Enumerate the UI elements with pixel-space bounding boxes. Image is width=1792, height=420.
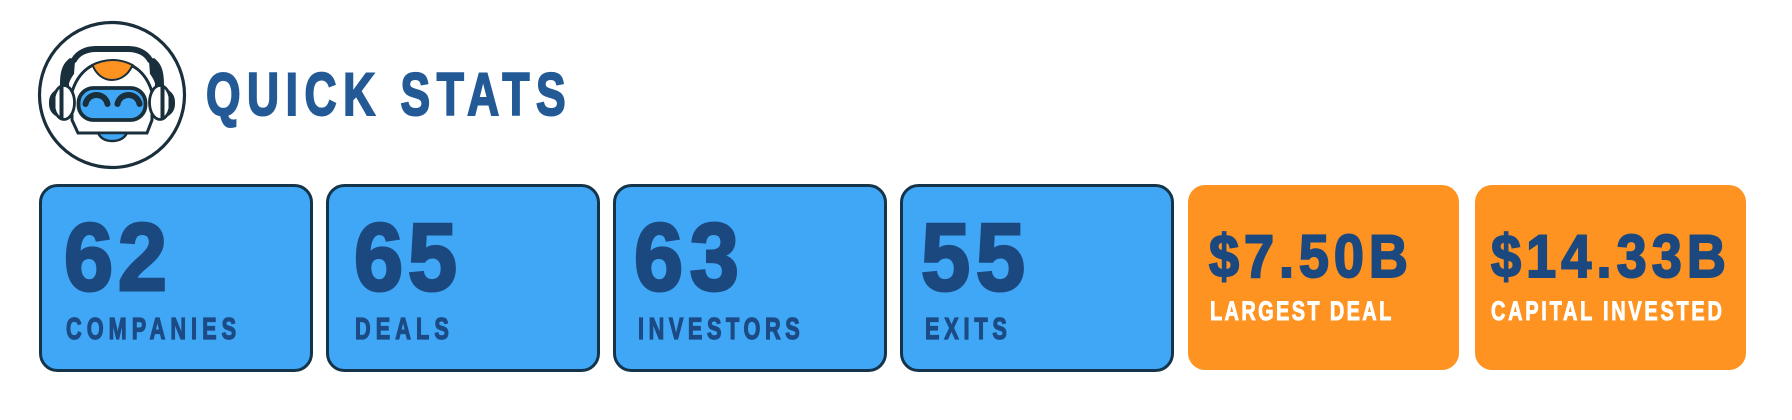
title: QUICK STATS	[206, 62, 566, 129]
label: exits: EXITS	[925, 311, 1007, 346]
panel: capital invested	[1475, 185, 1746, 370]
label: capital invested: CAPITAL INVESTED	[1491, 296, 1722, 327]
stat: $14.33B: $14.33B	[1491, 223, 1726, 291]
stat: 55: 55	[921, 204, 1025, 311]
panel: companies	[40, 186, 312, 370]
stat: $7.50B: $7.50B	[1209, 223, 1408, 291]
icon: robot with headphones	[40, 22, 184, 168]
panel: deals	[328, 186, 598, 370]
stat: 65: 65	[354, 204, 457, 311]
panel: largest deal	[1188, 185, 1459, 370]
label: deals: DEALS	[355, 311, 449, 346]
label: companies: COMPANIES	[66, 311, 236, 346]
label: investors: INVESTORS	[638, 311, 800, 346]
panel: investors	[614, 186, 886, 370]
panel: exits	[902, 186, 1172, 370]
stat: 63: 63	[634, 204, 739, 311]
stat: 62: 62	[64, 204, 167, 311]
label: largest deal: LARGEST DEAL	[1210, 296, 1391, 327]
